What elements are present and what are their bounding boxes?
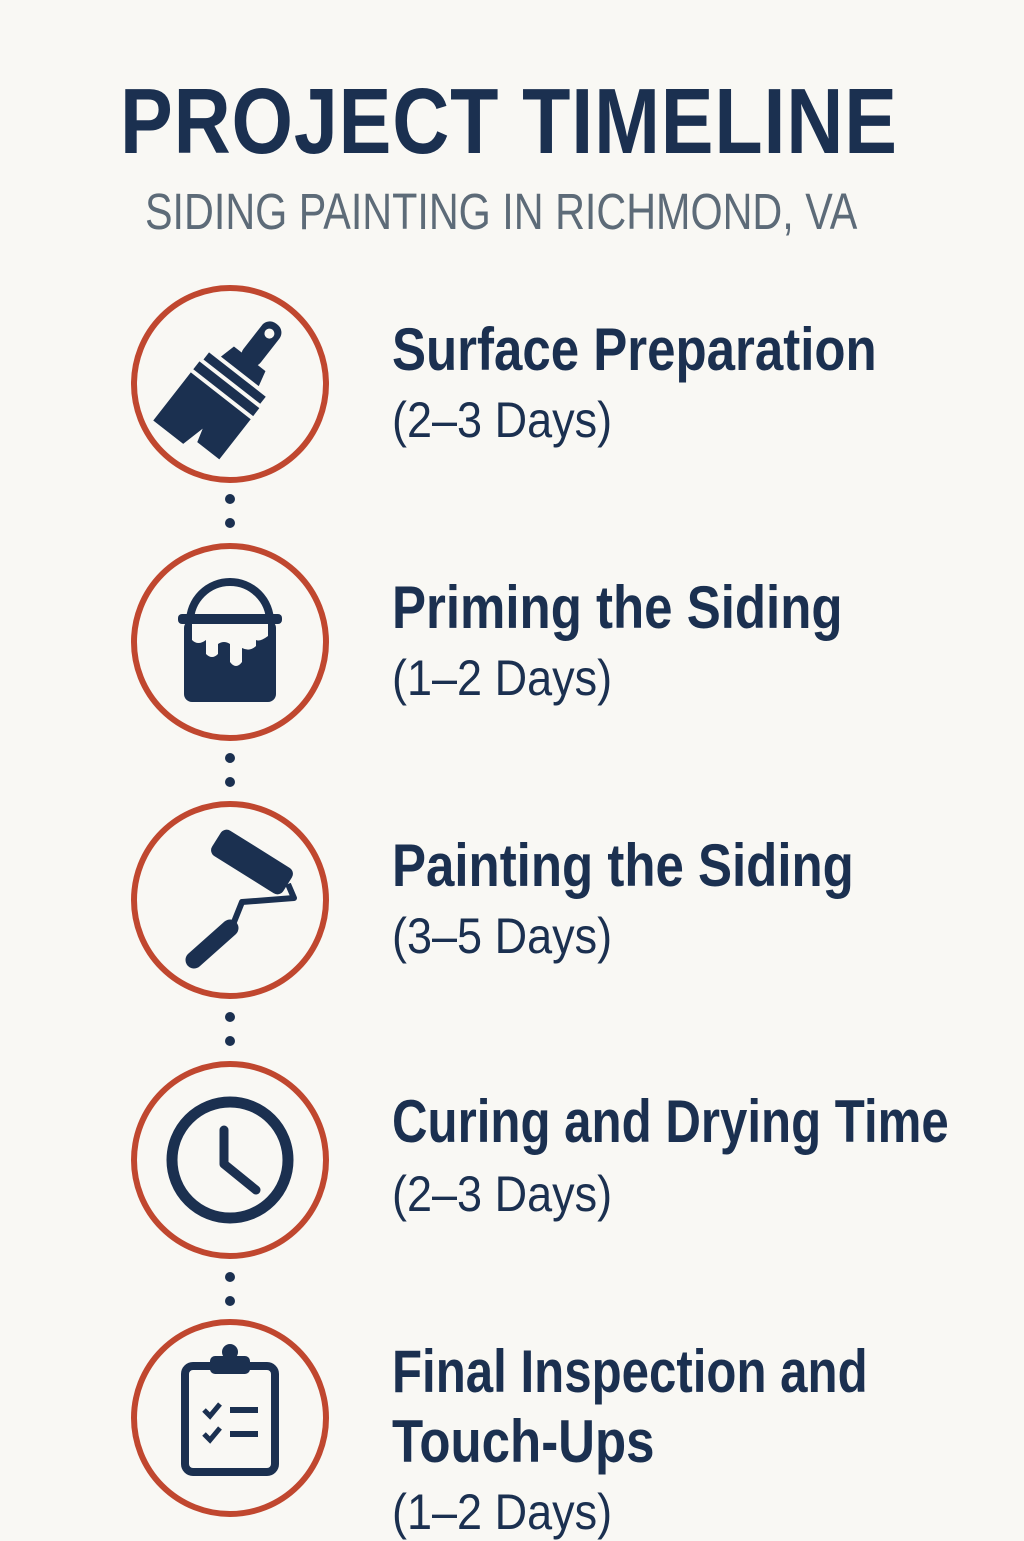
step 2 text: (1–2 Days)	[392, 650, 612, 706]
step 2 text: Priming the Siding	[392, 574, 843, 641]
step 4 text	[392, 1088, 949, 1222]
step 4 text: Curing and Drying Time	[392, 1088, 949, 1155]
step 5 text: (1–2 Days)	[392, 1484, 612, 1540]
step 5 text: Touch-Ups	[392, 1408, 655, 1475]
icon: clock	[134, 1064, 326, 1256]
icon: paint brush	[134, 288, 326, 480]
step 3 text: Painting the Siding	[392, 832, 854, 899]
icon: clipboard	[134, 1322, 326, 1514]
step 2 text	[392, 574, 843, 706]
step 1 text	[392, 316, 877, 448]
icon: paint bucket	[134, 546, 326, 738]
icon: paint roller	[134, 804, 326, 996]
step 5 text: Final Inspection and	[392, 1338, 868, 1405]
step 4 text: (2–3 Days)	[392, 1166, 612, 1222]
title: PROJECT TIMELINE	[120, 69, 898, 173]
step 5 text	[392, 1338, 868, 1540]
step 1 text: (2–3 Days)	[392, 392, 612, 448]
step 3 text: (3–5 Days)	[392, 908, 612, 964]
step 1 text: Surface Preparation	[392, 316, 877, 383]
subtitle: SIDING PAINTING IN RICHMOND, VA	[145, 183, 857, 240]
step 3 text	[392, 832, 854, 964]
